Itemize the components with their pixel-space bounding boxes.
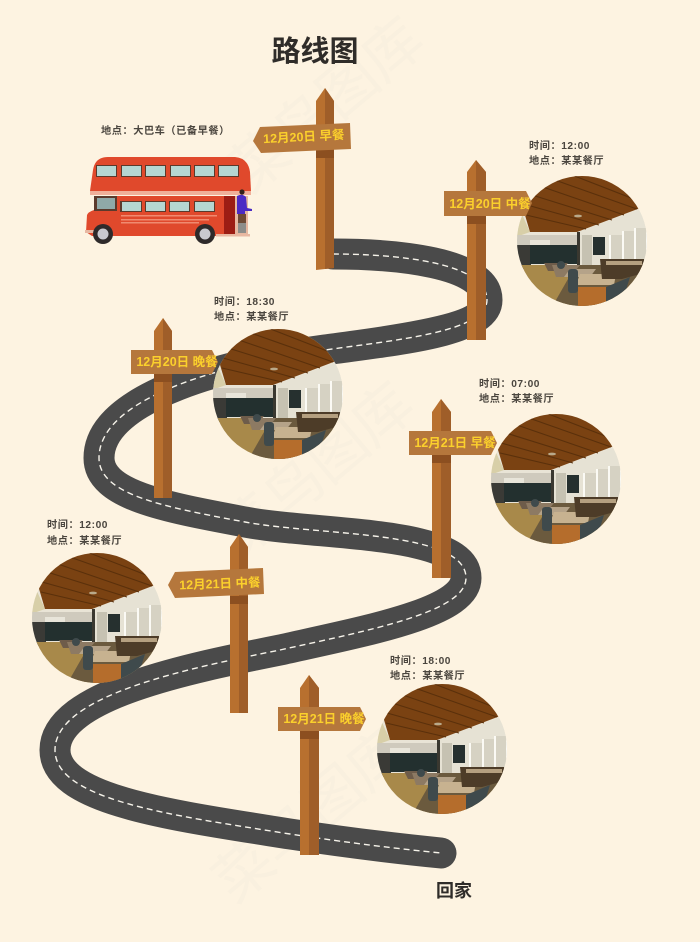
time/place captions: 地点：某某餐厅 [479, 392, 554, 405]
photo: restaurant 1 [516, 175, 648, 307]
signpost: 12月20日 中餐 [444, 160, 532, 340]
signpost: 12月21日 晚餐 [278, 675, 366, 855]
time/place captions: 时间：07:00 [479, 377, 540, 390]
watermark: 菜鸟图库 [217, 6, 436, 205]
time/place captions: 地点：某某餐厅 [47, 534, 122, 547]
title: 路线图 [271, 35, 359, 68]
time/place captions [47, 139, 604, 682]
signpost: 12月21日 早餐 [409, 399, 497, 578]
road [55, 254, 487, 853]
icon: passenger [237, 189, 252, 233]
watermark: 菜鸟图库 [202, 716, 421, 915]
signpost: 12月21日 早餐: 12月21日 早餐 [414, 435, 496, 450]
signpost: 12月20日 早餐 [253, 88, 351, 270]
watermark: 菜鸟图库 [207, 371, 426, 570]
icon: red double-decker bus [85, 157, 252, 244]
time/place captions: 时间：12:00 [47, 518, 108, 531]
time/place captions: 地点：某某餐厅 [390, 669, 465, 682]
photo: restaurant 3 [490, 413, 622, 545]
signpost: 12月20日 晚餐: 12月20日 晚餐 [136, 354, 218, 369]
time/place captions: 时间：18:00 [390, 654, 451, 667]
destination label: 回家 [436, 880, 472, 901]
photo: restaurant 5 [376, 683, 508, 815]
photo: restaurant 4 [31, 552, 163, 684]
photo: restaurant 2 [212, 328, 344, 460]
time/place captions: 时间：12:00 [529, 139, 590, 152]
time/place captions: 时间：18:30 [214, 295, 275, 308]
time/place captions: 地点：某某餐厅 [214, 310, 289, 323]
signpost: 12月20日 中餐: 12月20日 中餐 [449, 196, 531, 211]
signpost: 12月21日 晚餐: 12月21日 晚餐 [283, 711, 365, 726]
signpost: 12月21日 中餐: 12月21日 中餐 [179, 575, 261, 592]
signpost: 12月20日 晚餐 [131, 318, 218, 498]
time/place captions: 地点：某某餐厅 [529, 154, 604, 167]
bus location label: 地点：大巴车（已备早餐） [101, 124, 230, 137]
watermark [202, 6, 436, 915]
signpost: 12月21日 中餐 [168, 534, 264, 713]
signpost: 12月20日 早餐: 12月20日 早餐 [263, 127, 345, 146]
